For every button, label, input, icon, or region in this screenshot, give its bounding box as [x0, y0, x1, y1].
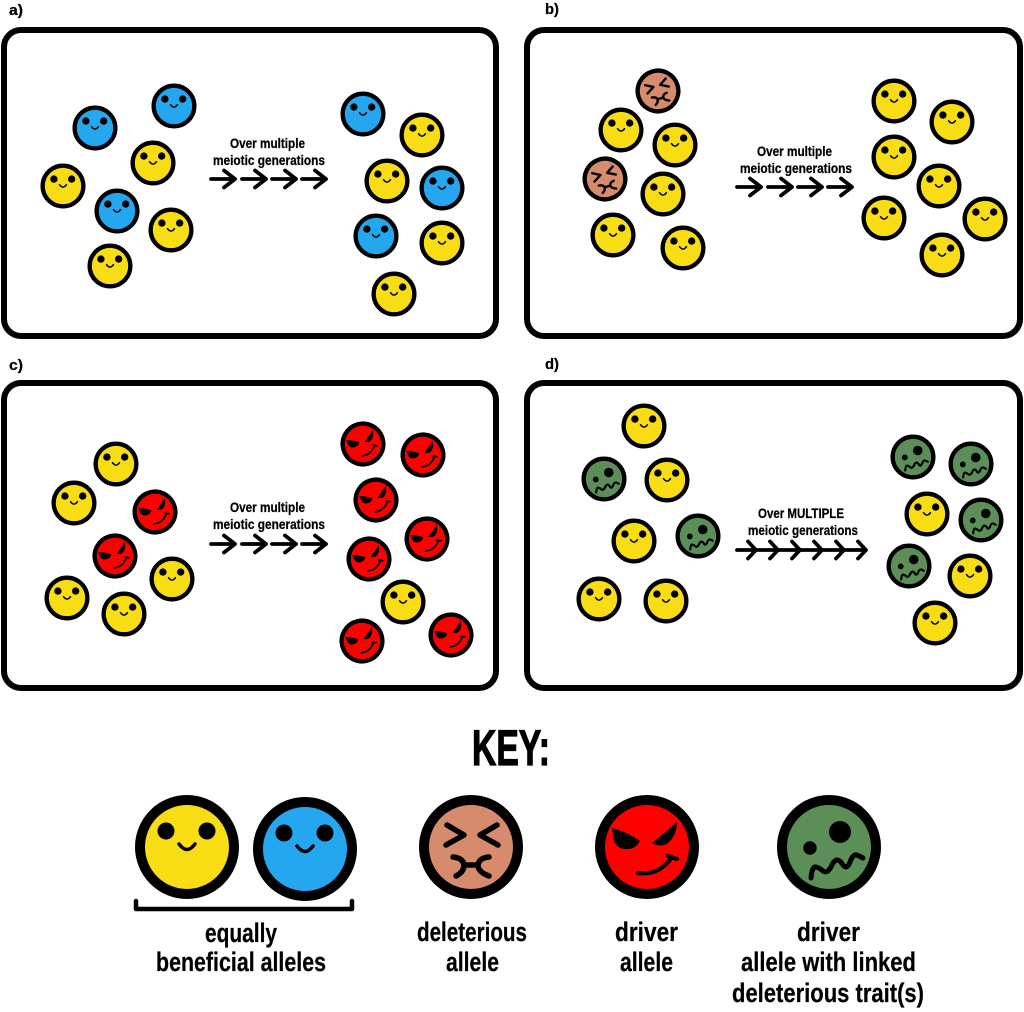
key heading: KEY: — [472, 720, 550, 776]
panel a: equally beneficial alleles — [4, 30, 496, 336]
starting population d — [579, 406, 718, 621]
key: driver allele with linked deleterious traits: driver — [797, 917, 860, 947]
arrow chain d — [737, 542, 866, 558]
panel c: driver allele — [4, 383, 496, 688]
starting population a — [43, 86, 194, 286]
resulting population b — [864, 81, 1005, 275]
resulting population a — [343, 94, 462, 314]
key: driver allele with linked deleterious traits — [732, 800, 924, 1008]
key: equally beneficial alleles: equally — [205, 918, 277, 948]
caption b: meiotic generations — [740, 160, 852, 176]
caption c: Over multiple — [230, 499, 305, 515]
caption c: meiotic generations — [213, 516, 325, 532]
caption c — [213, 499, 325, 532]
caption d: Over MULTIPLE — [758, 505, 844, 521]
key: driver allele: allele — [620, 947, 673, 977]
panel label c: c) — [9, 357, 23, 374]
caption a: Over multiple — [230, 135, 305, 151]
arrows c — [211, 536, 326, 552]
arrows b — [737, 178, 852, 196]
caption b — [740, 143, 852, 176]
key: deleterious allele: allele — [446, 947, 499, 977]
key: equally beneficial alleles: beneficial alleles — [156, 947, 326, 977]
key: driver allele — [600, 800, 694, 977]
key: equally beneficial alleles — [136, 800, 352, 977]
panel label a: a) — [9, 2, 23, 19]
key: driver allele with linked deleterious traits: allele with linked — [741, 947, 916, 977]
panel b: deleterious allele — [527, 30, 1020, 336]
resulting population c — [337, 419, 476, 666]
key: driver allele with linked deleterious traits: deleterious trait(s) — [732, 978, 924, 1008]
panel d: driver allele with linked deleterious trait — [527, 383, 1020, 688]
caption a — [213, 135, 325, 168]
resulting population d — [889, 437, 1001, 643]
caption a: meiotic generations — [213, 152, 325, 168]
key: deleterious allele: deleterious — [417, 917, 527, 947]
starting population c — [47, 444, 192, 634]
panel label b: b) — [545, 1, 559, 18]
caption b: Over multiple — [757, 143, 832, 159]
caption d — [748, 505, 858, 538]
arrows a — [211, 170, 326, 188]
key: driver allele: driver — [615, 917, 678, 947]
key: deleterious allele — [417, 800, 527, 977]
panel label d: d) — [545, 356, 559, 373]
caption d: meiotic generations — [748, 522, 858, 538]
starting population b — [579, 65, 703, 268]
